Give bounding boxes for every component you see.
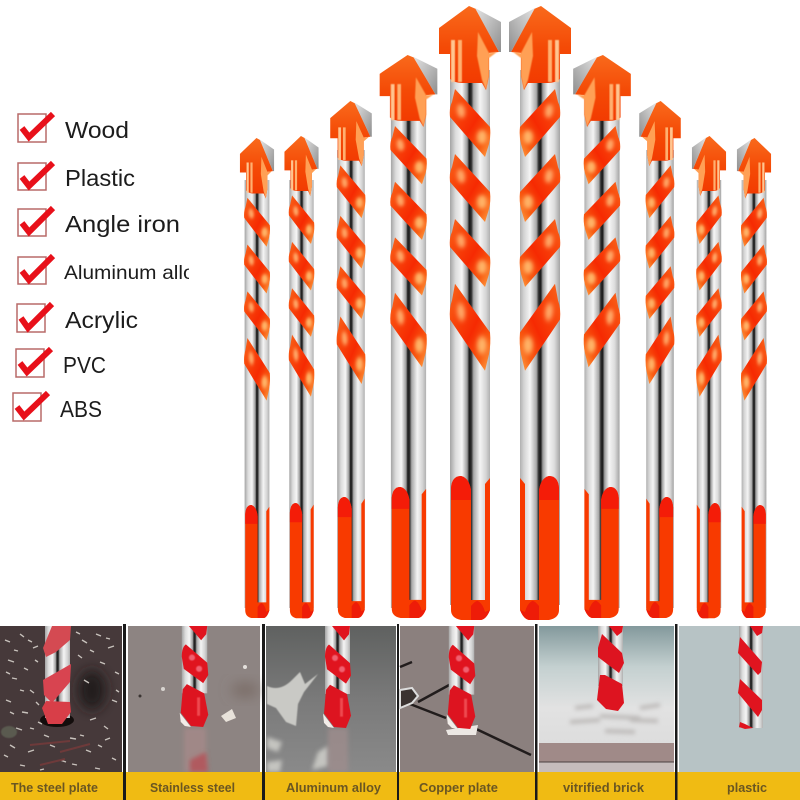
item: Plastic: [18, 163, 135, 191]
drill in plastic: [738, 626, 763, 729]
item: Angle iron: Angle iron: [65, 211, 180, 237]
caption: Stainless steel: Stainless steel: [150, 781, 235, 795]
item: PVC: PVC: [63, 352, 106, 378]
caption: Aluminum alloy: Aluminum alloy: [286, 781, 381, 795]
panel: plastic: [679, 626, 800, 773]
caption: Copper plate: Copper plate: [419, 781, 498, 795]
panel: aluminum alloy: [266, 626, 396, 773]
panel: copper plate: [400, 626, 534, 773]
item: Acrylic: Acrylic: [65, 307, 138, 333]
drill in copper plate: [447, 626, 475, 729]
item: Plastic: Plastic: [65, 165, 135, 191]
item: Aluminum alloy: Aluminum alloy: [64, 262, 205, 284]
item: Wood: [18, 114, 129, 143]
drill bit 5: [439, 6, 501, 620]
item: Wood: Wood: [65, 117, 129, 143]
drill bit set: [240, 6, 771, 620]
caption: plastic: plastic: [727, 781, 767, 795]
item: PVC: [16, 349, 106, 378]
drill in steel plate: [42, 626, 71, 724]
drill bit 9: [692, 136, 726, 618]
panel dividers: [123, 624, 678, 800]
drill bit 4: [380, 55, 437, 618]
caption bar: [0, 772, 800, 800]
panel: steel plate: [0, 626, 122, 773]
material photo strip: [0, 624, 800, 800]
drill bit 1: [240, 138, 274, 618]
item: ABS: [13, 393, 102, 422]
drill bit 8: [639, 101, 681, 618]
panel: vitrified brick: [539, 626, 674, 773]
item: Acrylic: [17, 304, 138, 333]
item: Aluminum alloy: [18, 256, 205, 284]
drill in aluminum: [323, 626, 351, 728]
item: Angle iron: [18, 208, 180, 237]
checklist of materials: [13, 114, 205, 422]
drill bit 7: [573, 55, 631, 618]
drill bit 2: [284, 136, 319, 618]
caption: vitrified brick: vitrified brick: [563, 781, 644, 795]
drill in brick: [597, 626, 624, 711]
item: ABS: ABS: [60, 396, 102, 422]
panel: stainless steel: [128, 626, 260, 773]
drill bit 10: [737, 138, 771, 618]
drill bit 6: [509, 6, 571, 620]
drill in stainless steel: [180, 626, 208, 727]
caption: The steel plate: The steel plate: [11, 781, 98, 795]
drill bit 3: [330, 101, 372, 618]
